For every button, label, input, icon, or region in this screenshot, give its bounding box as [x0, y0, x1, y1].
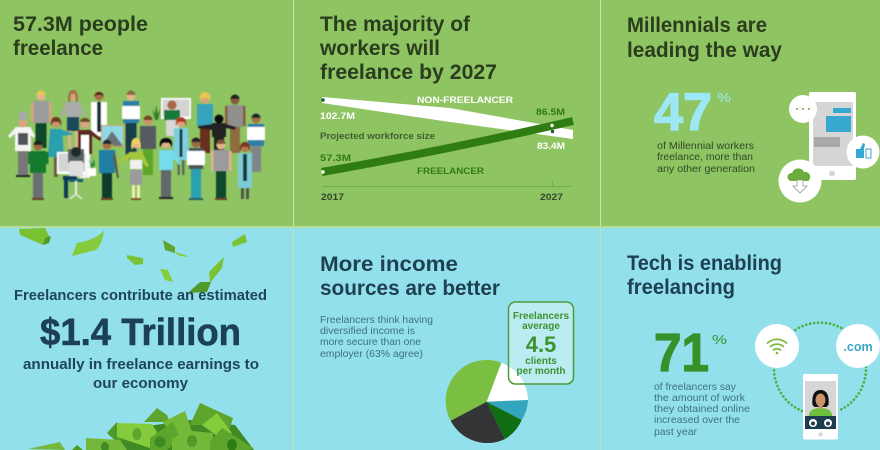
text: freelancers online work description: of freelancers say [654, 381, 737, 393]
heading: 57.3M people freelance: 57.3M people [13, 13, 148, 36]
illustration: crowd of freelancers [8, 90, 265, 200]
chart labels: Projected workforce size [320, 131, 435, 142]
stat: 47 percent: % [717, 90, 732, 105]
text: freelancers online work description [654, 381, 750, 438]
chart labels: NON-FREELANCER [417, 95, 513, 106]
heading: millennials are leading the way [627, 14, 782, 62]
line chart: projected workforce size [320, 95, 573, 203]
heading: the majority of workers will freelance by 2027: The majority of [320, 13, 471, 36]
heading: the majority of workers will freelance by 2027: freelance by 2027 [320, 61, 497, 84]
text: millennial workers description: of Millennial workers [657, 140, 754, 152]
chart labels: 102.7M [320, 111, 355, 122]
heading: 57.3M people freelance [13, 13, 148, 60]
text: freelancers online work description: the amount of work [654, 392, 746, 404]
heading: the majority of workers will freelance by 2027 [319, 13, 497, 84]
illustration: pile of money [28, 403, 254, 450]
chart labels: 83.4M [537, 141, 565, 152]
icon: speech bubble [789, 95, 817, 123]
heading: tech is enabling freelancing: Tech is enabling [627, 252, 782, 275]
line: non-freelancer [322, 97, 573, 139]
heading: millennials are leading the way: leading the way [627, 39, 782, 62]
text: annually in freelance earnings: annually in freelance earnings to [23, 356, 259, 373]
text: freelancers online work description: they obtained online [654, 403, 750, 415]
panel: majority of workers will freelance [319, 13, 573, 203]
heading: more income sources are better [320, 253, 500, 300]
chart labels: 57.3M [320, 153, 351, 164]
stat: 71 percent: % [712, 332, 728, 347]
callout: 4.5 clients per month: 4.5 [526, 332, 556, 357]
callout: 4.5 clients per month [508, 302, 574, 384]
text: diversified income description: employer (63% agree) [320, 348, 423, 360]
illustration: falling money [19, 228, 247, 293]
text: freelancers online work description: increased over the [654, 414, 740, 426]
icon: phone with video call [803, 374, 838, 440]
chart labels [320, 95, 565, 203]
text: millennial workers description [657, 140, 755, 175]
text: freelancers contribute an estimated: Freelancers contribute an estimated [14, 287, 267, 304]
callout: 4.5 clients per month: clients [525, 356, 557, 367]
panel: 57.3M people freelance [8, 13, 265, 200]
line: freelancer [322, 121, 573, 172]
text: annually in freelance earnings: our economy [93, 375, 189, 392]
icon: wifi [755, 324, 799, 368]
text: diversified income description [320, 314, 433, 360]
pie chart: income sources [446, 360, 528, 443]
heading: tech is enabling freelancing: freelancing [627, 276, 735, 299]
text: diversified income description: Freelancers think having [320, 314, 433, 326]
panel: $1.4 trillion contribution [14, 228, 267, 450]
stat: 71 percent: 71 [654, 323, 709, 383]
text: diversified income description: more secure than one [320, 336, 421, 348]
icon: dot com [836, 324, 880, 368]
panel: millennials are leading the way [627, 14, 880, 202]
callout: 4.5 clients per month: Freelancers [513, 311, 570, 322]
text: diversified income description: diversified income is [320, 325, 415, 337]
text: freelancers online work description: past year [654, 426, 697, 438]
text: millennial workers description: freelance, more than [657, 151, 753, 163]
chart labels: 86.5M [536, 107, 565, 118]
text: annually in freelance earnings [23, 356, 259, 392]
heading: more income sources are better: sources are better [320, 277, 500, 300]
text: millennial workers description: any other generation [657, 163, 755, 175]
callout: 4.5 clients per month: average [522, 321, 560, 332]
panel: more income sources are better [320, 253, 574, 443]
heading: millennials are leading the way: Millennials are [627, 14, 767, 37]
icon: thumbs up [846, 136, 880, 168]
panel: tech is enabling freelancing [627, 252, 880, 440]
chart labels: FREELANCER [417, 166, 484, 177]
stat: $1.4 trillion: $1.4 Trillion [40, 312, 241, 354]
chart labels: 2027 [540, 192, 563, 203]
icon: dot com: .com [843, 340, 873, 354]
heading: the majority of workers will freelance by 2027: workers will [319, 37, 440, 60]
heading: 57.3M people freelance: freelance [13, 37, 103, 60]
dotted connector ring [774, 323, 866, 411]
icon: smartphone with chat [809, 92, 856, 180]
heading: more income sources are better: More income [320, 253, 458, 276]
stat: 47 percent: 47 [654, 83, 712, 142]
heading: tech is enabling freelancing [627, 252, 782, 299]
chart labels: 2017 [321, 192, 344, 203]
icon: cloud download [778, 160, 822, 202]
callout: 4.5 clients per month: per month [517, 366, 565, 377]
